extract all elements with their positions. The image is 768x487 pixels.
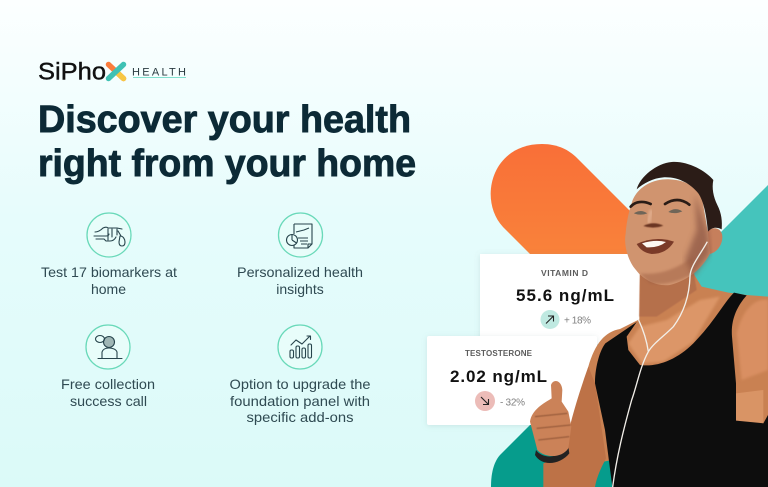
logo: HEALTH — [132, 66, 186, 78]
ear — [707, 228, 722, 254]
arm highlight — [737, 300, 768, 380]
caption — [237, 264, 363, 297]
card: testosterone — [427, 336, 597, 425]
card: vitamin D: 55.6 ng/mL — [516, 286, 614, 305]
caption: success call — [70, 393, 147, 409]
caption — [230, 376, 371, 425]
caption: Option to upgrade the — [230, 376, 371, 392]
caption — [61, 376, 155, 409]
armpit skin patch — [736, 390, 763, 423]
headline: Discover your health — [38, 99, 411, 141]
caption: Free collection — [61, 376, 155, 392]
caption — [41, 264, 177, 297]
caption: insights — [276, 281, 324, 297]
caption: home — [91, 281, 126, 297]
caption: foundation panel with — [230, 393, 370, 409]
caption: specific add-ons — [246, 409, 354, 425]
logo: SiPho — [38, 58, 106, 86]
face shadow — [685, 193, 710, 277]
card: testosterone: 2.02 ng/mL — [450, 367, 547, 386]
feature: personalized insights — [237, 213, 363, 297]
headline: right from your home — [38, 143, 416, 185]
card: vitamin D: + 18% — [564, 316, 591, 326]
headline — [38, 99, 416, 185]
feature: test 17 biomarkers — [41, 213, 177, 297]
orange pill shape — [491, 144, 660, 254]
caption: Personalized health — [237, 264, 363, 280]
feature: upgrade option — [230, 325, 371, 425]
teal triangle — [630, 185, 768, 330]
feature: free collection call — [61, 325, 155, 409]
hair — [637, 162, 722, 232]
black tank top — [595, 293, 768, 487]
right eye — [668, 209, 682, 213]
icon: support agent — [86, 325, 130, 369]
icon: down arrow — [475, 391, 495, 411]
nostrils — [643, 223, 663, 228]
brows — [631, 200, 689, 207]
card: vitamin D — [480, 254, 650, 344]
card: testosterone: TESTOSTERONE — [465, 349, 533, 358]
wristband — [535, 447, 569, 463]
icon: report — [278, 213, 322, 257]
face — [625, 179, 710, 285]
card: testosterone: - 32% — [500, 398, 525, 408]
mouth — [637, 239, 674, 254]
left arm and forearm — [543, 367, 606, 487]
icon: growth chart — [278, 325, 322, 369]
nose bridge highlight — [648, 210, 652, 223]
earphone cable — [613, 242, 707, 487]
finger creases — [535, 413, 571, 440]
logo — [38, 58, 186, 86]
teeth — [642, 241, 666, 247]
thumbs-up fist — [530, 381, 571, 456]
chin shadow — [640, 257, 693, 284]
dark teal shape — [491, 425, 620, 487]
card: vitamin D: VITAMIN D — [541, 268, 588, 278]
icon: finger prick — [87, 213, 131, 257]
torso and right arm — [580, 270, 768, 463]
icon: up arrow — [540, 310, 560, 329]
neck shadow — [639, 270, 697, 317]
left eye — [634, 211, 647, 215]
caption: Test 17 biomarkers at — [41, 264, 177, 280]
chest highlight — [628, 297, 720, 363]
photo: smiling man with earphones — [530, 162, 768, 487]
